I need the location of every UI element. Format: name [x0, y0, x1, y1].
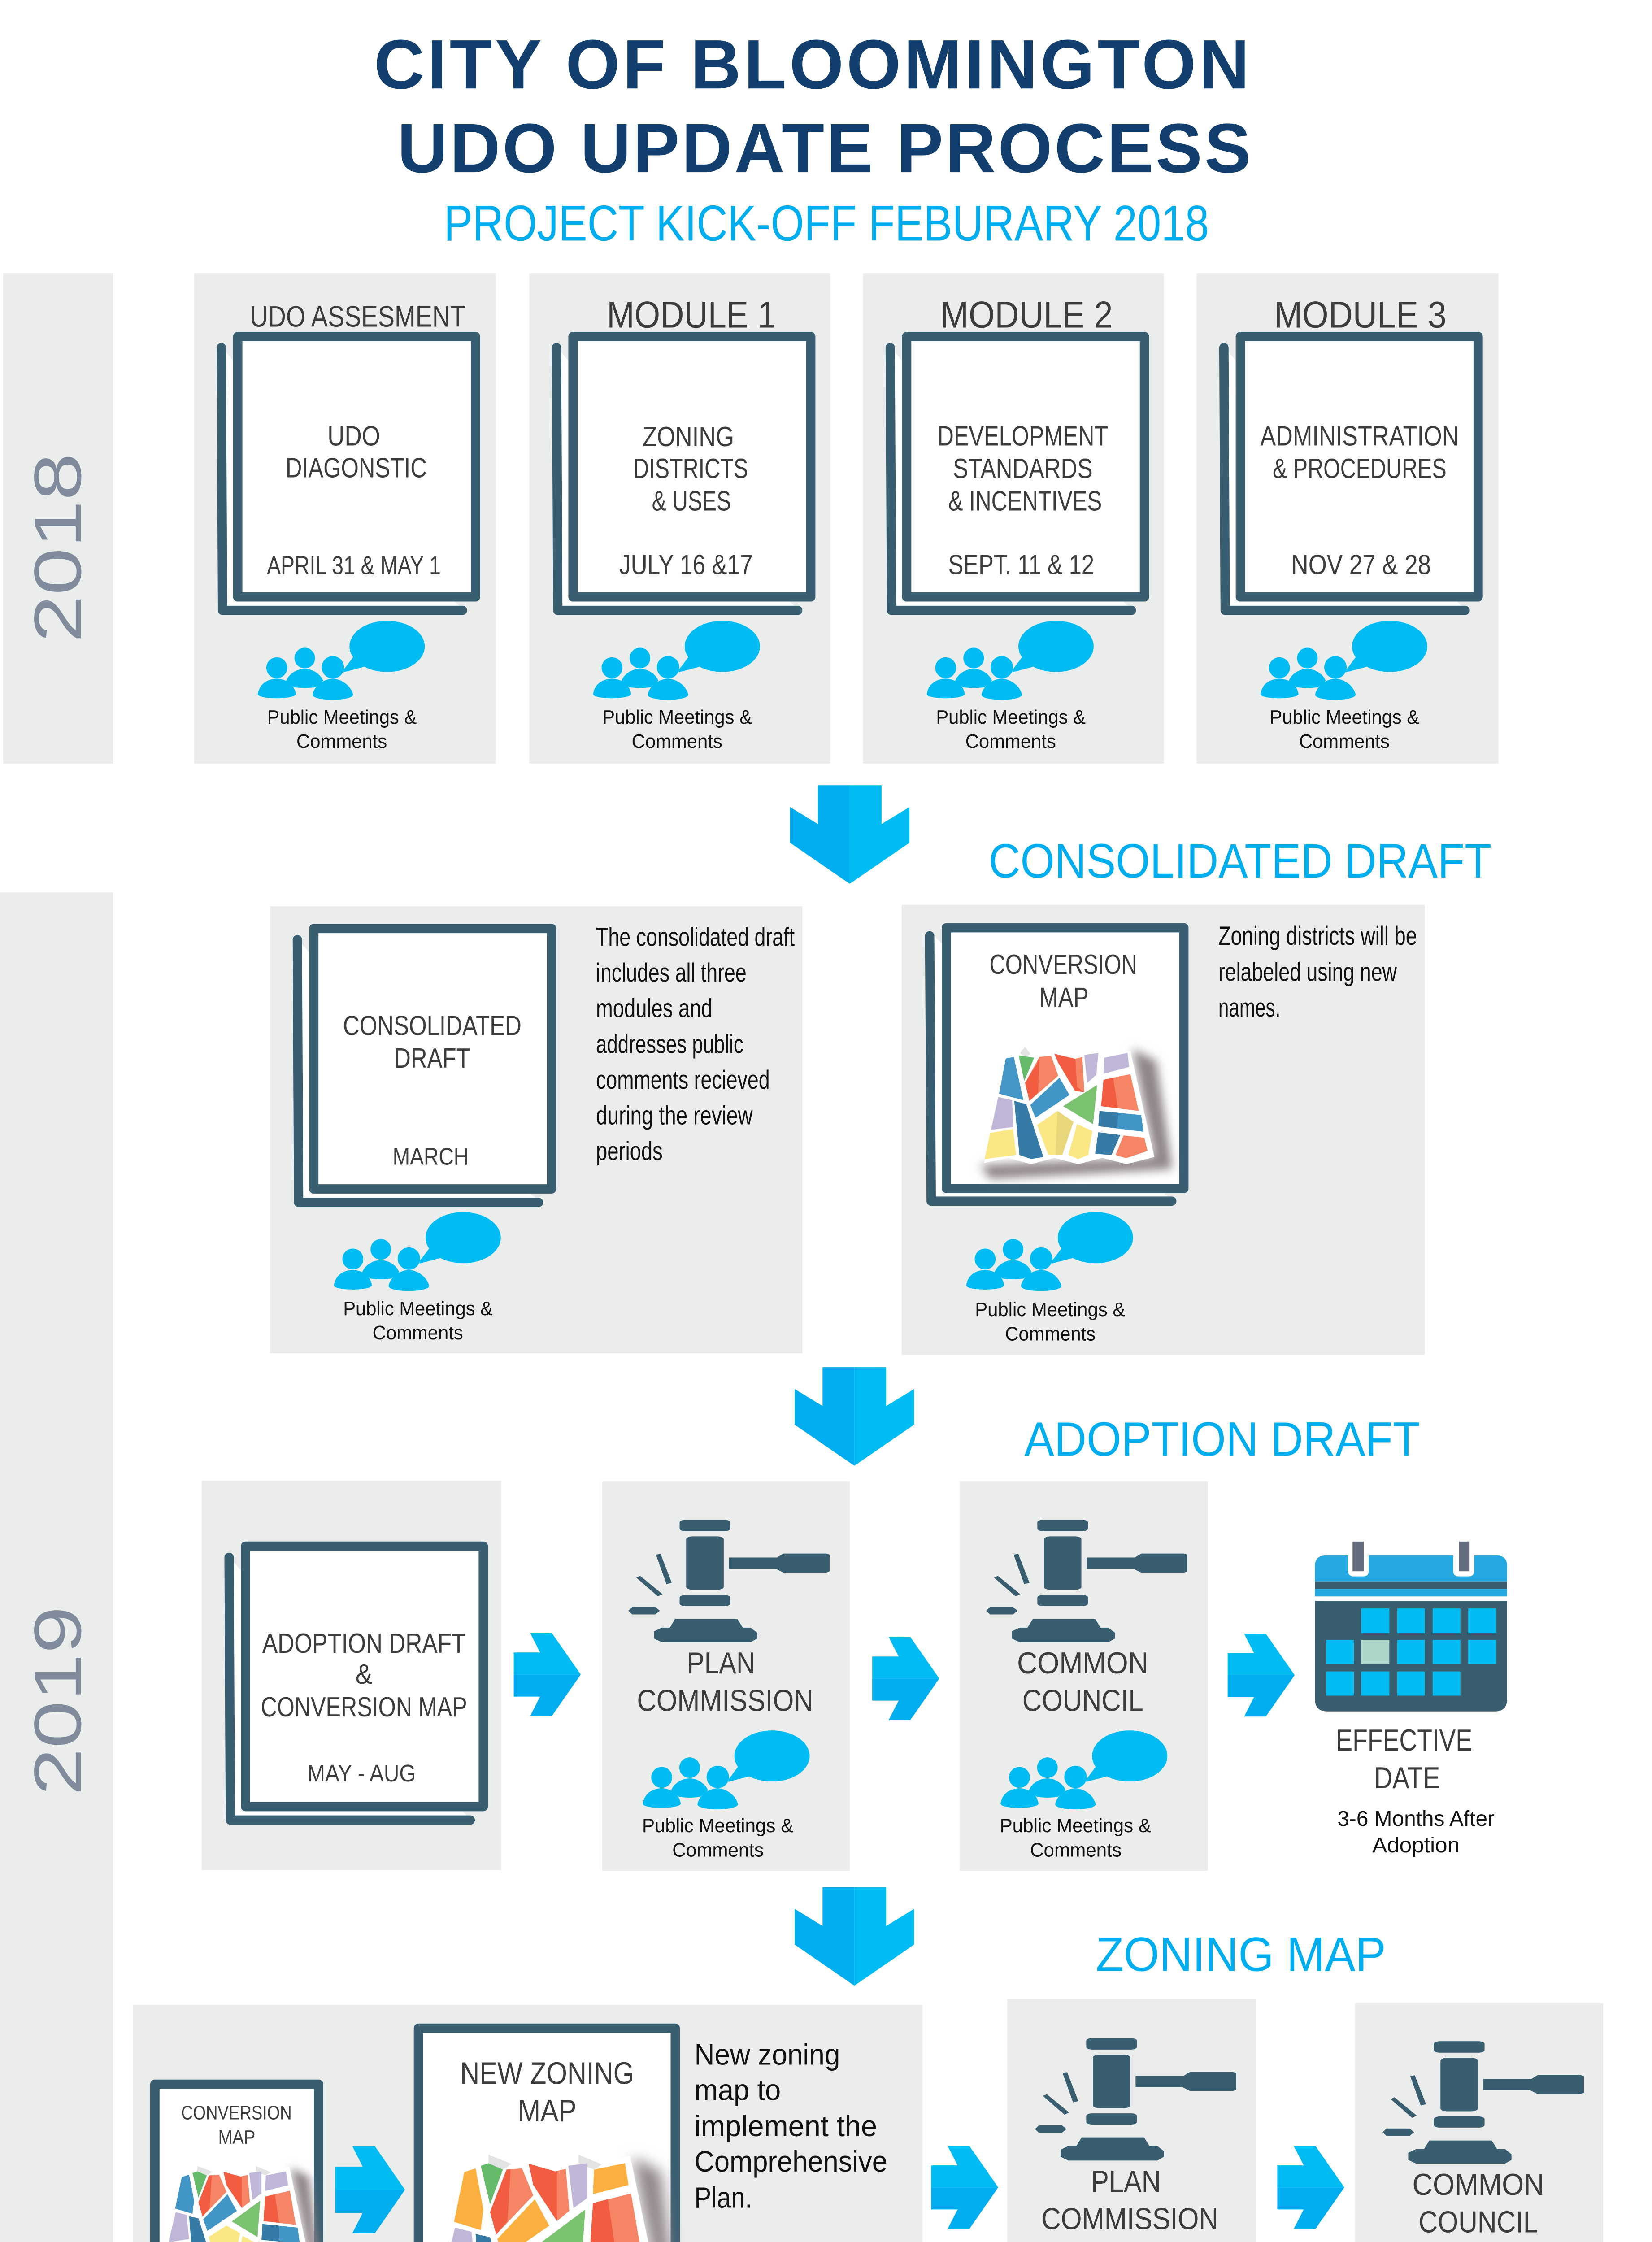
description: relabeled using new — [1218, 957, 1397, 986]
arrow: to new zoning map — [335, 2146, 405, 2233]
label: effective date — [1336, 1724, 1495, 1857]
document text: UDO — [327, 421, 380, 452]
subtitle: project kick-off: PROJECT KICK-OFF FEBURARY 2018 — [444, 195, 1209, 251]
document text: MAP — [1039, 982, 1089, 1013]
icon: public meetings — [643, 1730, 810, 1809]
document icon — [1224, 336, 1478, 610]
document icon — [890, 336, 1144, 610]
icon: colorful map — [980, 1047, 1172, 1179]
document text: STANDARDS — [953, 453, 1093, 484]
panel: UDO assessment — [194, 273, 496, 764]
description: The consolidated draft — [596, 922, 795, 952]
document text: & PROCEDURES — [1273, 453, 1447, 484]
panel: adoption draft document — [202, 1481, 501, 1870]
caption: Comments — [965, 731, 1056, 752]
description — [1218, 921, 1417, 1022]
icon: public meetings — [966, 1212, 1133, 1291]
arrow: to common council — [872, 1637, 939, 1720]
heading: adoption draft: ADOPTION DRAFT — [1024, 1412, 1420, 1466]
document text: DISTRICTS — [633, 453, 748, 484]
title — [374, 26, 1251, 187]
icon: gavel — [986, 1520, 1187, 1642]
document text — [261, 1628, 467, 1787]
icon: public meetings — [593, 621, 760, 700]
arrow: down to adoption draft — [795, 1367, 914, 1466]
document text: ADMINISTRATION — [1260, 421, 1459, 452]
caption: Public Meetings & — [1269, 707, 1419, 728]
description: addresses public — [596, 1030, 743, 1059]
panel: year 2018: 2018 — [20, 453, 95, 643]
caption — [267, 707, 417, 752]
caption — [602, 707, 752, 752]
panel: conversion map — [902, 905, 1425, 1355]
description — [694, 2038, 887, 2214]
document text: & — [356, 1659, 373, 1690]
description: names. — [1218, 993, 1280, 1022]
caption: Public Meetings & — [642, 1815, 793, 1837]
panel: module 1 — [529, 273, 830, 764]
caption: Public Meetings & — [343, 1298, 493, 1320]
document frame — [930, 928, 1184, 1201]
new zoning map card: MAP — [518, 2093, 577, 2128]
document text: CONSOLIDATED — [343, 1010, 522, 1041]
document text — [989, 949, 1137, 1013]
arrow: down to zoning map — [795, 1887, 914, 1986]
label: PLAN — [687, 1647, 755, 1680]
panel: module 2 — [863, 273, 1164, 764]
icon: public meetings — [927, 621, 1094, 700]
caption: Comments — [1005, 1323, 1096, 1345]
label: COMMISSION — [637, 1684, 813, 1717]
document text: DIAGONSTIC — [286, 452, 427, 483]
label: effective date: Adoption — [1372, 1833, 1460, 1857]
description: comments recieved — [596, 1065, 770, 1095]
label: PLAN — [1091, 2165, 1161, 2199]
label: effective date: EFFECTIVE — [1336, 1724, 1472, 1757]
caption: Public Meetings & — [267, 707, 417, 728]
conversion map card: MAP — [218, 2127, 255, 2148]
icon: public meetings — [258, 621, 425, 700]
document text: CONVERSION MAP — [261, 1692, 467, 1723]
description — [596, 922, 795, 1166]
caption: Comments — [296, 731, 387, 752]
caption: Comments — [632, 731, 722, 752]
document text: ZONING — [643, 421, 734, 452]
icon: public meetings — [1000, 1730, 1167, 1809]
document text: DEVELOPMENT — [937, 421, 1108, 452]
conversion map card — [155, 2084, 321, 2242]
document text: CONVERSION — [989, 949, 1137, 980]
caption: Comments — [1299, 731, 1390, 752]
arrow: to zoning common council — [1277, 2146, 1344, 2229]
panel: common council — [960, 1481, 1208, 1871]
caption — [1000, 1815, 1151, 1861]
title: CITY OF BLOOMINGTON — [374, 26, 1249, 104]
panel: year 2019 — [0, 892, 113, 2242]
caption — [642, 1815, 793, 1861]
new zoning map card — [418, 2028, 679, 2242]
panel: consolidated draft — [270, 906, 802, 1353]
document text: MARCH — [393, 1143, 469, 1170]
description: New zoning — [694, 2038, 840, 2071]
document text — [1260, 421, 1459, 581]
label — [1017, 1647, 1148, 1717]
document icon — [222, 336, 475, 610]
description: map to — [694, 2073, 781, 2106]
description: Comprehensive — [694, 2145, 887, 2178]
arrow: to plan commission — [514, 1633, 581, 1716]
arrow: down to consolidated draft — [790, 785, 909, 884]
caption — [936, 707, 1086, 752]
icon: gavel — [1382, 2041, 1584, 2164]
document text: ADOPTION DRAFT — [262, 1628, 465, 1659]
caption — [1269, 707, 1419, 752]
document text — [619, 421, 753, 581]
description: Zoning districts will be — [1218, 921, 1417, 951]
label: effective date: 3-6 Months After — [1337, 1807, 1495, 1831]
document text: SEPT. 11 & 12 — [948, 550, 1094, 581]
document text: APRIL 31 & MAY 1 — [267, 552, 441, 580]
icon: gavel — [628, 1520, 830, 1642]
label: COMMISSION — [1041, 2202, 1218, 2236]
description: during the review — [596, 1101, 753, 1130]
document text — [343, 1010, 522, 1170]
panel: plan commission — [602, 1481, 850, 1871]
label — [1413, 2168, 1544, 2239]
icon: gavel — [1035, 2038, 1236, 2160]
caption: Comments — [1030, 1840, 1122, 1861]
description: modules and — [596, 994, 713, 1023]
conversion map card: CONVERSION — [181, 2103, 292, 2124]
label: COMMON — [1413, 2168, 1544, 2202]
caption: Public Meetings & — [975, 1299, 1125, 1321]
arrow: to zoning plan commission — [931, 2146, 998, 2229]
panel: year 2019: 2019 — [20, 1606, 95, 1795]
panel: zoning common council — [1355, 2003, 1603, 2242]
heading: zoning map: ZONING MAP — [1096, 1927, 1386, 1981]
caption — [975, 1299, 1125, 1345]
label — [1041, 2165, 1218, 2236]
caption: Comments — [373, 1322, 463, 1344]
document icon — [229, 1546, 483, 1820]
document text: & INCENTIVES — [948, 486, 1102, 517]
description: periods — [596, 1137, 663, 1166]
document text — [937, 421, 1108, 581]
description: implement the — [694, 2109, 877, 2142]
title: UDO UPDATE PROCESS — [397, 109, 1251, 187]
caption: Public Meetings & — [602, 707, 752, 728]
caption — [343, 1298, 493, 1344]
panel: year 2018 — [3, 273, 113, 764]
icon: public meetings — [334, 1212, 501, 1291]
document text: JULY 16 &17 — [619, 550, 753, 581]
document text: DRAFT — [394, 1043, 470, 1074]
document text: NOV 27 & 28 — [1291, 550, 1431, 581]
label: COMMON — [1017, 1647, 1148, 1680]
caption: Public Meetings & — [936, 707, 1086, 728]
arrow: to effective date — [1228, 1634, 1295, 1716]
caption: Public Meetings & — [1000, 1815, 1151, 1837]
label — [637, 1647, 813, 1717]
heading: consolidated draft: CONSOLIDATED DRAFT — [989, 834, 1491, 888]
heading: module 1: MODULE 1 — [607, 294, 776, 335]
document text: & USES — [652, 486, 731, 517]
panel: module 3 — [1196, 273, 1499, 764]
icon: public meetings — [1261, 621, 1427, 700]
label: COUNCIL — [1418, 2206, 1538, 2239]
document icon — [297, 929, 552, 1203]
heading: module 3: MODULE 3 — [1274, 294, 1447, 335]
icon: calendar — [1315, 1542, 1507, 1712]
new zoning map card: NEW ZONING — [460, 2055, 634, 2090]
caption: Comments — [672, 1840, 764, 1861]
description: Plan. — [694, 2181, 752, 2214]
heading: module 2: MODULE 2 — [940, 294, 1113, 335]
description: includes all three — [596, 958, 747, 987]
document icon — [556, 336, 811, 610]
heading: UDO assesment: UDO ASSESMENT — [250, 300, 465, 333]
panel: zoning map — [133, 2005, 922, 2242]
panel: zoning plan commission — [1007, 1999, 1256, 2242]
label: COUNCIL — [1022, 1684, 1143, 1717]
label: effective date: DATE — [1374, 1761, 1440, 1795]
document text: MAY - AUG — [307, 1760, 416, 1787]
document text — [267, 421, 441, 580]
